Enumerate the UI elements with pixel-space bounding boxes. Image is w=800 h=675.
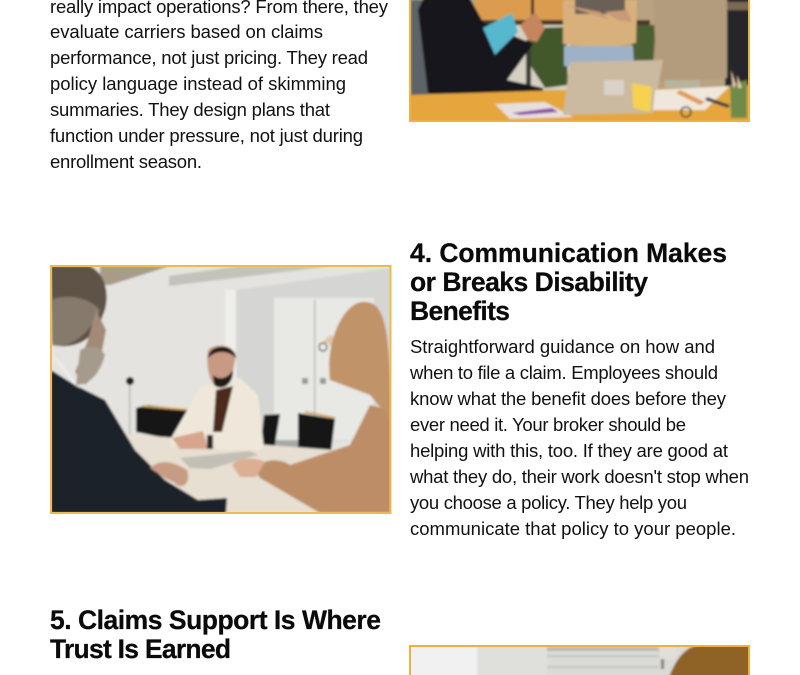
text block: section 3 body: policy language instead of skimming xyxy=(50,73,346,94)
text block: section 4 body: Straightforward guidance on how and xyxy=(410,336,715,357)
heading: section 5: 5. Claims Support Is Where xyxy=(50,605,381,635)
text block: section 3 body: performance, not just pricing. They read xyxy=(50,47,368,68)
heading: section 4: Benefits xyxy=(410,296,510,326)
text block: section 3 body: summaries. They design plans that xyxy=(50,99,330,120)
heading: section 4: or Breaks Disability xyxy=(410,267,648,297)
text block: section 3 body: enrollment season. xyxy=(50,151,202,172)
text block: section 3 body xyxy=(50,0,389,172)
text block: section 3 body: function under pressure, not just during xyxy=(50,125,363,146)
text block: section 4 body: helping with this, too. If they are good at xyxy=(410,440,728,461)
text block: section 4 body: know what the benefit does before they xyxy=(410,388,727,409)
text block: section 4 body: communicate that policy to your people. xyxy=(410,518,736,539)
heading: section 5 xyxy=(50,605,381,664)
heading: section 4 xyxy=(410,238,727,326)
photo: team meeting around a desk xyxy=(409,0,750,122)
text block: section 3 body: evaluate carriers based on claims xyxy=(50,21,323,42)
text block: section 4 body xyxy=(409,336,749,539)
text block: section 4 body: when to file a claim. Employees should xyxy=(409,362,718,383)
text block: section 4 body: you choose a policy. They help you xyxy=(410,492,687,513)
text block: section 4 body: ever need it. Your broker should be xyxy=(410,414,686,435)
photo: section 5 image top edge xyxy=(409,645,750,675)
heading: section 4: 4. Communication Makes xyxy=(410,238,727,268)
text block: section 4 body: what they do, their work doesn't stop when xyxy=(409,466,749,487)
heading: section 5: Trust Is Earned xyxy=(50,634,231,664)
photo: three people in a meeting room xyxy=(51,266,400,513)
